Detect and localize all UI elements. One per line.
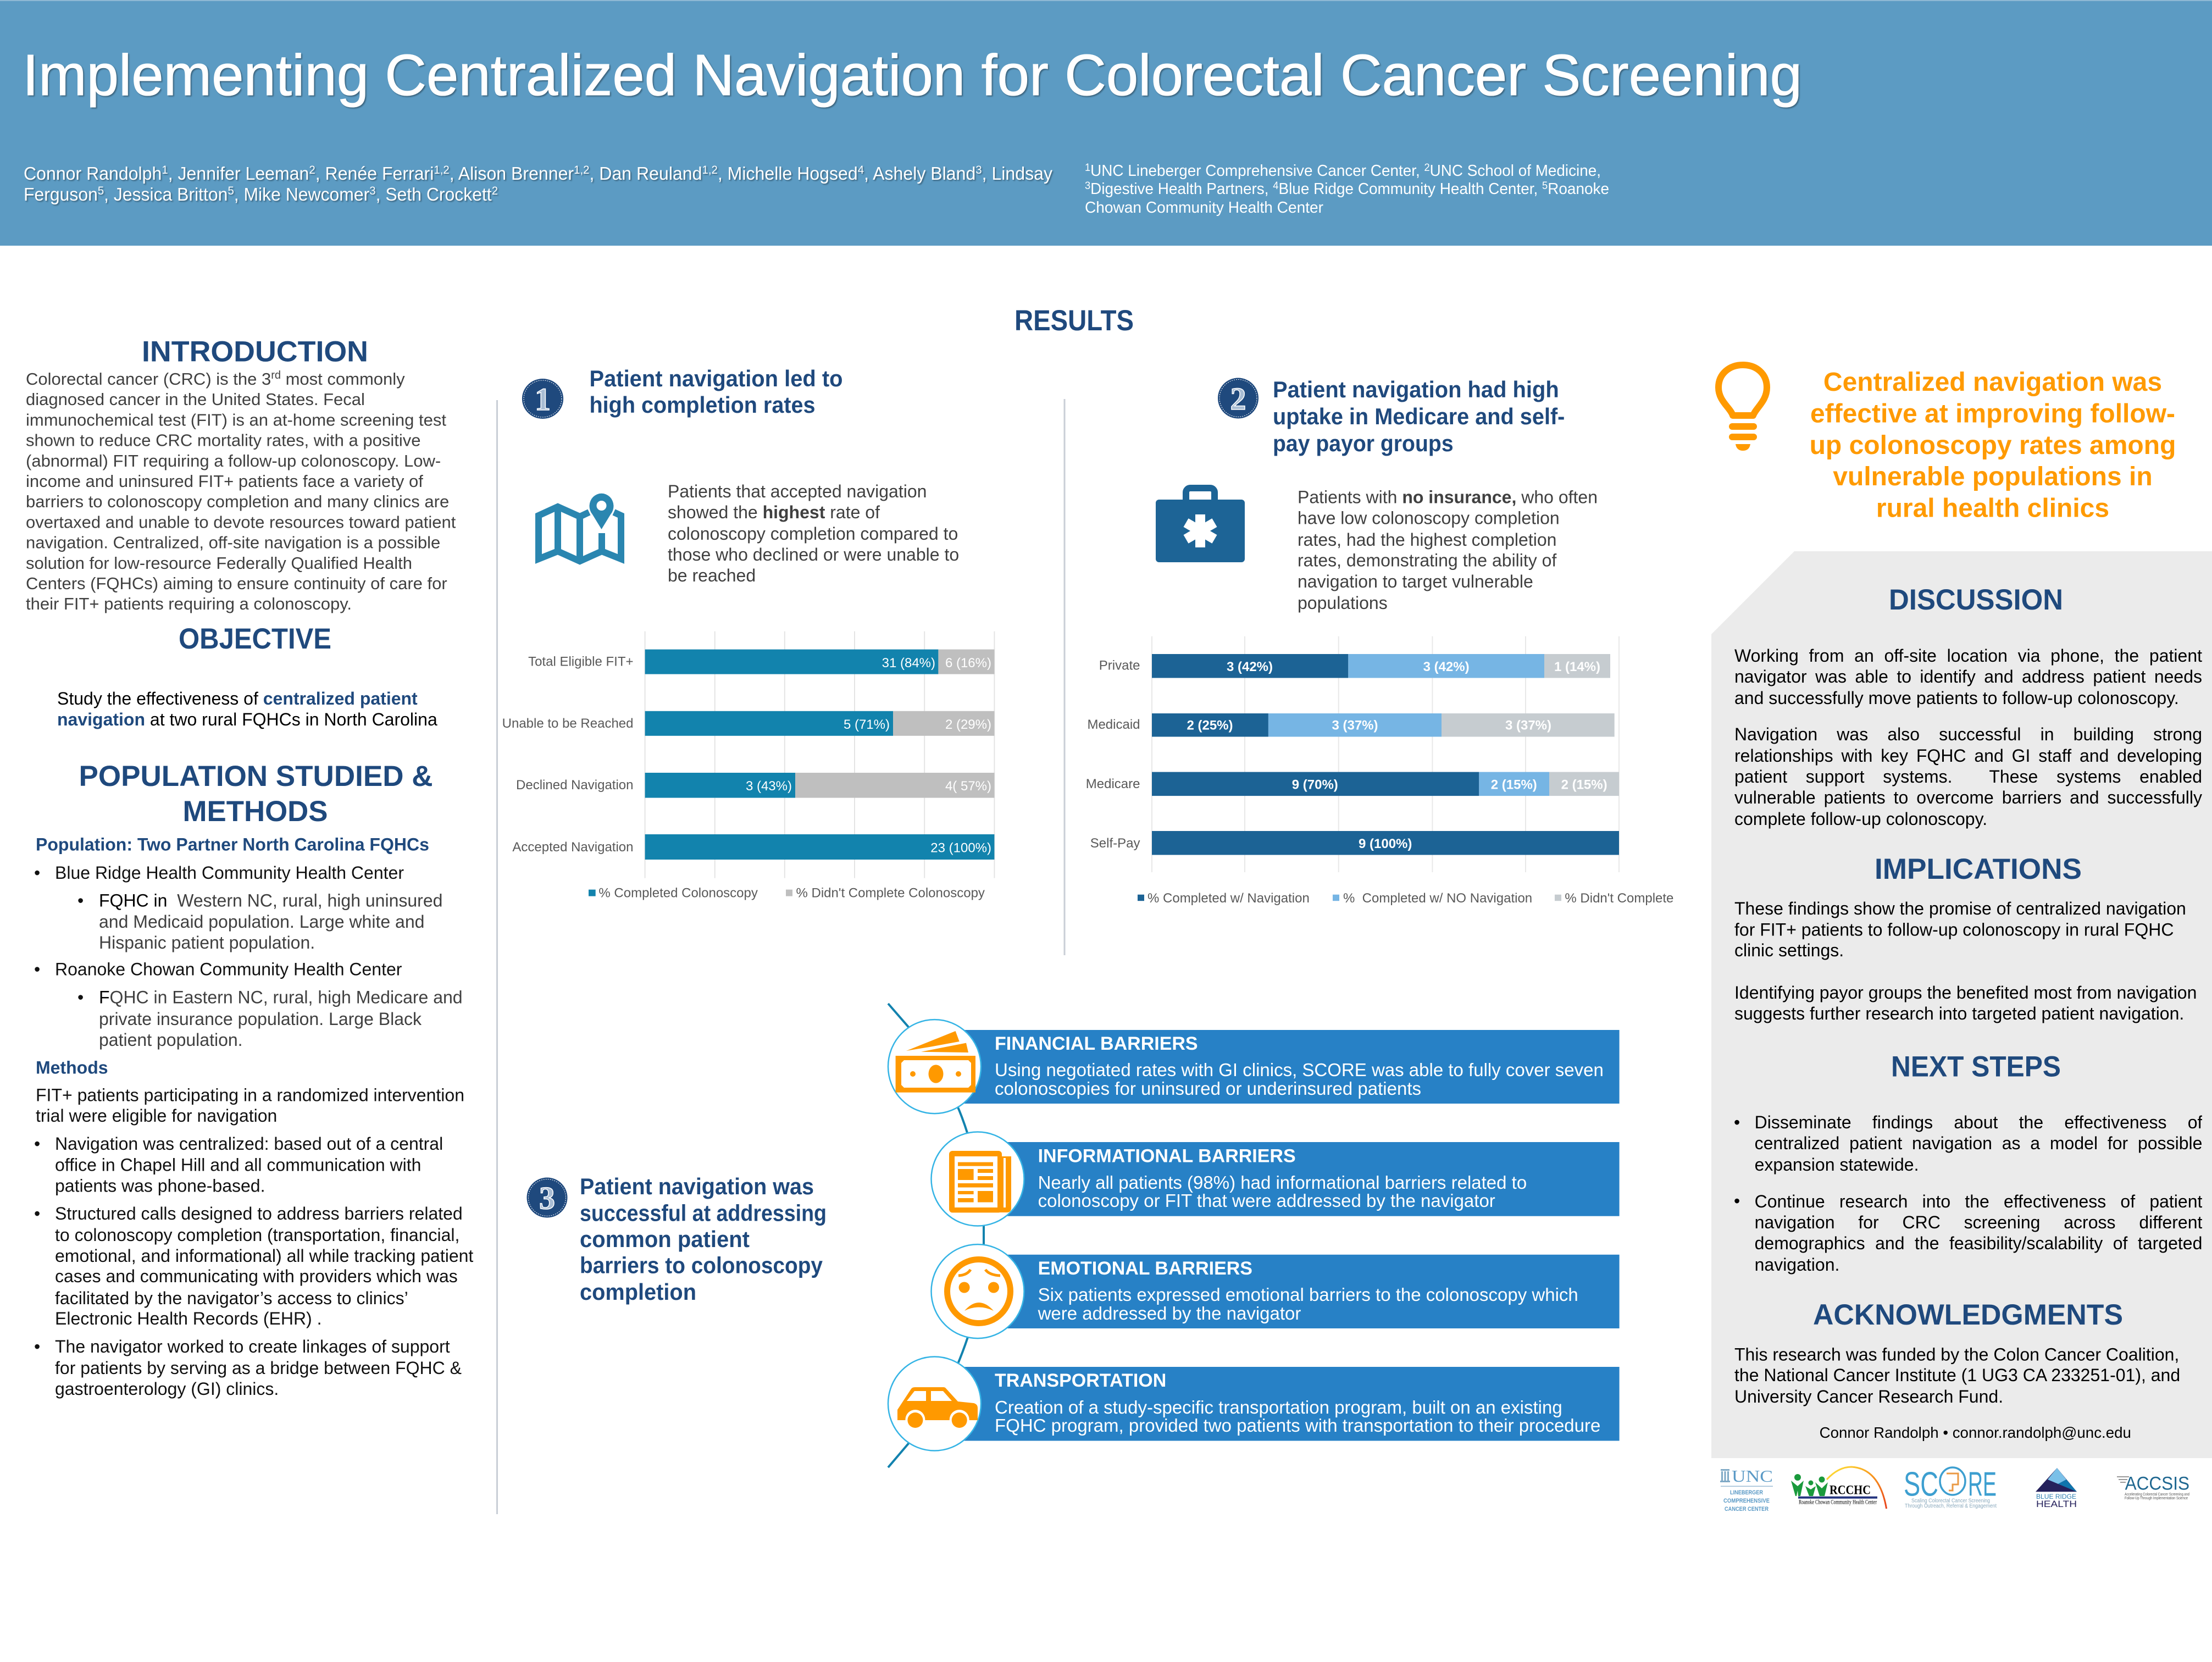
legend: completion chart bbox=[589, 886, 985, 901]
authors: 1 bbox=[162, 164, 168, 176]
authors: , Dan Reuland bbox=[589, 163, 702, 184]
heading: result 2: Patient navigation had high bbox=[1273, 376, 1559, 402]
heading: result 1: Patient navigation led to bbox=[589, 365, 843, 391]
heading: result 3: successful at addressing bbox=[580, 1200, 827, 1226]
text: emotional: were addressed by the navigator bbox=[1038, 1303, 1301, 1323]
text: objective body: navigation at two rural FQHCs in North Carolina bbox=[57, 710, 437, 729]
text: methods list: emotional, and informational) all while tracking patient bbox=[55, 1246, 473, 1266]
heading: acknowledgments: ACKNOWLEDGMENTS bbox=[1813, 1299, 2123, 1331]
affiliations: Chowan Community Health Center bbox=[1085, 199, 1323, 217]
text: acknowledgments body bbox=[1734, 1344, 2180, 1406]
bar: private: 3 (42%) bbox=[1227, 660, 1273, 674]
text: introduction body: income and uninsured FIT+ patients face a variety of bbox=[26, 472, 423, 491]
bar: private: Private bbox=[1099, 658, 1140, 673]
heading: result 3: barriers to colonoscopy bbox=[580, 1253, 823, 1278]
text: financial: Using negotiated rates with GI clinics, SCORE was able to fully cover seven bbox=[995, 1060, 1604, 1080]
text: methods list: Structured calls designed to address barriers related bbox=[55, 1204, 463, 1223]
text: acknowledgments body: University Cancer Research Fund. bbox=[1734, 1387, 2003, 1406]
legend: payor chart: % Completed w/ Navigation bbox=[1147, 891, 1310, 906]
bar: medicaid: Medicaid bbox=[1087, 717, 1140, 732]
text: next steps list: demographics and the feasibility/scalability of targeted bbox=[1755, 1233, 2202, 1253]
legend: payor chart: % Didn't Complete bbox=[1565, 891, 1673, 906]
icon: newspaper bbox=[949, 1151, 1011, 1212]
authors: 2 bbox=[492, 185, 498, 197]
bar: private: 1 (14%) bbox=[1554, 660, 1600, 674]
barrier: informational bbox=[931, 1132, 1620, 1226]
text: result 2 description: rates, had the highest completion bbox=[1298, 530, 1556, 550]
text: result 1 description: showed the highest rate of bbox=[668, 502, 880, 522]
text: acknowledgments body: This research was funded by the Colon Cancer Coalition, bbox=[1734, 1344, 2179, 1364]
authors: , Michelle Hogsed bbox=[718, 163, 858, 184]
bar: medicare bbox=[1086, 772, 1619, 796]
text: next steps list: Continue research into the effectiveness of patient bbox=[1755, 1192, 2202, 1211]
text: result 1 description: be reached bbox=[668, 566, 756, 585]
logo: Blue Ridge Health: BLUE RIDGE bbox=[2036, 1493, 2076, 1500]
text: introduction body: (abnormal) FIT requiring a follow-up colonoscopy. Low- bbox=[26, 451, 441, 470]
bar: accepted navigation: 23 (100%) bbox=[930, 841, 991, 856]
text: methods list bbox=[34, 1085, 473, 1399]
text: introduction body: overtaxed and unable to devote resources toward patient bbox=[26, 512, 456, 531]
heading: population studied and methods bbox=[79, 760, 433, 828]
icon: number 1: 1 bbox=[535, 381, 551, 417]
bar: self-pay bbox=[1090, 831, 1619, 855]
authors: 5 bbox=[228, 185, 234, 197]
panel: result 2 payor groups bbox=[1086, 376, 1673, 906]
authors: , Renée Ferrari bbox=[315, 163, 434, 184]
logo: ACCSIS: Accelerating Colorectal Cancer Screening and bbox=[2125, 1492, 2189, 1497]
bar: medicare: 2 (15%) bbox=[1491, 777, 1537, 793]
heading: population studied and methods: POPULATION STUDIED & bbox=[79, 760, 433, 793]
heading: result 3: completion bbox=[580, 1279, 696, 1305]
icon: number 1 bbox=[522, 379, 563, 419]
text: transportation bbox=[995, 1370, 1600, 1436]
text: methods list: facilitated by the navigator’s access to clinics’ bbox=[55, 1288, 408, 1308]
text: result 2 description: Patients with no insurance, who often bbox=[1298, 487, 1598, 507]
heading: result 2: uptake in Medicare and self- bbox=[1273, 403, 1565, 429]
affiliations: 1 bbox=[1085, 162, 1090, 174]
text: introduction body: shown to reduce CRC mortality rates, with a positive bbox=[26, 431, 420, 450]
text: population list: • bbox=[77, 988, 84, 1007]
icon: map with pin bbox=[539, 494, 621, 561]
text: result 2 description bbox=[1298, 487, 1598, 613]
logo: SCORE: Scaling Colorectal Cancer Screening bbox=[1911, 1498, 1990, 1504]
callout: key takeaway: vulnerable populations in bbox=[1833, 462, 2153, 491]
icon: sad face bbox=[947, 1260, 1010, 1323]
bar: declined navigation: Declined Navigation bbox=[516, 778, 633, 793]
text: population list: FQHC in Eastern NC, rural, high Medicare and bbox=[99, 988, 463, 1007]
authors: , Ashely Bland bbox=[864, 163, 975, 184]
authors: Connor Randolph bbox=[24, 163, 166, 184]
heading: result 2 bbox=[1273, 376, 1565, 456]
text: introduction body: diagnosed cancer in the United States. Fecal bbox=[26, 390, 365, 409]
heading: implications: IMPLICATIONS bbox=[1875, 853, 2082, 885]
text: introduction body: Centers (FQHCs) aiming to ensure continuity of care for bbox=[26, 574, 447, 593]
text: discussion body bbox=[1734, 645, 2202, 832]
logo: SCORE: SC bbox=[1904, 1466, 1938, 1504]
bar: declined navigation: 3 (43%) bbox=[746, 779, 792, 794]
icon: lightbulb bbox=[1718, 365, 1767, 451]
text: methods list: Electronic Health Records (EHR) . bbox=[55, 1309, 321, 1328]
text: population list: and Medicaid population. Large white and bbox=[99, 912, 424, 932]
bar: unable to be reached: 2 (29%) bbox=[945, 717, 991, 732]
text: implications body: These findings show the promise of centralized navigation bbox=[1734, 899, 2186, 918]
text: population list: patient population. bbox=[99, 1030, 243, 1050]
callout: key takeaway: effective at improving follow- bbox=[1810, 399, 2175, 429]
text: methods list: for patients by serving as a bridge between FQHC & bbox=[55, 1358, 462, 1378]
text: acknowledgments body: the National Cancer Institute (1 UG3 CA 233251-01), and bbox=[1734, 1365, 2180, 1385]
text: implications body bbox=[1734, 899, 2197, 1023]
bar: total eligible: 6 (16%) bbox=[945, 656, 991, 671]
bar: total eligible: Total Eligible FIT+ bbox=[528, 655, 633, 669]
subheading: methods: Methods bbox=[36, 1057, 108, 1077]
text: next steps list: • bbox=[1734, 1112, 1740, 1132]
text: result 2 description: populations bbox=[1298, 593, 1388, 613]
text: next steps list: • bbox=[1734, 1191, 1740, 1211]
bar: unable to be reached bbox=[502, 711, 994, 736]
heading: result 3 bbox=[580, 1173, 827, 1305]
text: implications body: suggests further research into targeted patient navigation. bbox=[1734, 1004, 2184, 1023]
heading: discussion: DISCUSSION bbox=[1889, 584, 2063, 616]
authors: 1,2 bbox=[434, 164, 450, 176]
legend: payor chart bbox=[1138, 891, 1673, 906]
text: transportation: TRANSPORTATION bbox=[995, 1370, 1166, 1391]
logo: SCORE bbox=[1904, 1466, 1997, 1509]
logo: UNC Lineberger: CANCER CENTER bbox=[1725, 1506, 1769, 1513]
text: methods list: The navigator worked to create linkages of support bbox=[55, 1337, 450, 1356]
affiliations: 3 bbox=[1085, 180, 1090, 192]
text: contact: Connor Randolph • connor.randolph@unc.edu bbox=[1820, 1424, 2131, 1441]
text: population list: private insurance population. Large Black bbox=[99, 1009, 422, 1029]
text: discussion body: complete follow-up colonoscopy. bbox=[1734, 809, 1987, 829]
title: Implementing Centralized Navigation for Colorectal Cancer Screening bbox=[23, 43, 1802, 108]
bar: private: 3 (42%) bbox=[1423, 660, 1470, 674]
text: population list: Hispanic patient population. bbox=[99, 933, 315, 952]
text: population list: Blue Ridge Health Community Health Center bbox=[55, 863, 404, 883]
text: discussion body: patient support systems. These systems enabled bbox=[1734, 767, 2202, 786]
affiliations: UNC Lineberger Comprehensive Cancer Center, bbox=[1090, 162, 1424, 180]
text: methods list: • bbox=[34, 1204, 40, 1223]
chart: payor stacked bars bbox=[1086, 636, 1673, 906]
authors: 1,2 bbox=[702, 164, 718, 176]
authors: 4 bbox=[858, 164, 864, 176]
text: informational: Nearly all patients (98%) had informational barriers related to bbox=[1038, 1172, 1527, 1193]
text: discussion body: Working from an off-site location via phone, the patient bbox=[1734, 646, 2202, 666]
callout: key takeaway bbox=[1810, 368, 2176, 523]
icon: number 3: 3 bbox=[539, 1181, 555, 1216]
bar: unable to be reached: Unable to be Reached bbox=[502, 716, 633, 731]
text: methods list: trial were eligible for navigation bbox=[36, 1106, 277, 1126]
heading: objective: OBJECTIVE bbox=[179, 623, 331, 655]
text: objective body bbox=[57, 689, 437, 729]
text: methods list: • bbox=[34, 1134, 40, 1154]
text: objective body: Study the effectiveness of centralized patient bbox=[57, 689, 418, 708]
affiliations: Blue Ridge Community Health Center, bbox=[1278, 180, 1542, 198]
logo: SCORE: RE bbox=[1968, 1466, 1997, 1504]
logo: ACCSIS bbox=[2117, 1473, 2189, 1500]
heading: population studied and methods: METHODS bbox=[182, 795, 328, 828]
text: population list: • bbox=[34, 960, 40, 979]
bar: medicare: 9 (70%) bbox=[1292, 777, 1338, 793]
text: methods list: Navigation was centralized: based out of a central bbox=[55, 1134, 443, 1154]
text: next steps list: expansion statewide. bbox=[1755, 1155, 1919, 1175]
logo: RCCHC: RCCHC bbox=[1830, 1483, 1871, 1497]
text: emotional: EMOTIONAL BARRIERS bbox=[1038, 1258, 1252, 1279]
text: discussion body: vulnerable patients to overcome barriers and successfully bbox=[1734, 788, 2202, 807]
authors: 2 bbox=[309, 164, 315, 176]
panel: left column bbox=[26, 335, 473, 1399]
text: emotional bbox=[1038, 1258, 1578, 1323]
text: implications body: Identifying payor groups the benefited most from navigation bbox=[1734, 983, 2197, 1002]
authors: , Alison Brenner bbox=[450, 163, 574, 184]
text: discussion body: navigator was able to identify and address patient needs bbox=[1734, 667, 2202, 686]
logo: ACCSIS: ACCSIS bbox=[2125, 1473, 2189, 1494]
heading: result 1: high completion rates bbox=[589, 392, 816, 418]
logo: Blue Ridge Health bbox=[2036, 1468, 2077, 1509]
logo: UNC Lineberger: LINEBERGER bbox=[1730, 1489, 1763, 1496]
text: methods list: FIT+ patients participating in a randomized intervention bbox=[36, 1085, 464, 1105]
barrier: transportation bbox=[888, 1356, 1620, 1451]
text: financial: FINANCIAL BARRIERS bbox=[995, 1033, 1198, 1054]
text: informational: INFORMATIONAL BARRIERS bbox=[1038, 1146, 1296, 1167]
text: next steps list bbox=[1734, 1112, 2202, 1278]
bar: medicaid: 3 (37%) bbox=[1505, 718, 1551, 733]
text: result 2 description: have low colonoscopy completion bbox=[1298, 508, 1560, 528]
heading: results: RESULTS bbox=[1014, 304, 1134, 337]
affiliations: 5 bbox=[1542, 180, 1548, 192]
logo: SCORE: Through Outreach, Referral & Engagement bbox=[1905, 1503, 1997, 1509]
bar: self-pay: 9 (100%) bbox=[1359, 836, 1412, 851]
text: result 1 description bbox=[668, 481, 959, 585]
text: implications body: for FIT+ patients to follow-up colonoscopy in rural FQHC bbox=[1734, 920, 2174, 940]
text: methods list: cases and communicating with providers which was bbox=[55, 1266, 458, 1286]
authors: , Jessica Britton bbox=[104, 184, 228, 204]
logos row bbox=[1720, 1466, 2189, 1513]
panel: right column grey bbox=[1711, 551, 2212, 1458]
subheading: population: Population: Two Partner North Carolina FQHCs bbox=[36, 834, 429, 854]
heading: result 3: common patient bbox=[580, 1226, 750, 1252]
bar: declined navigation bbox=[516, 773, 994, 798]
text: introduction body: most commonly bbox=[281, 369, 405, 389]
logo: RCCHC bbox=[1791, 1467, 1887, 1509]
bar: medicare: 2 (15%) bbox=[1561, 777, 1607, 793]
text: financial: colonoscopies for uninsured or underinsured patients bbox=[995, 1078, 1421, 1099]
affiliations: Digestive Health Partners, bbox=[1090, 180, 1273, 198]
text: methods list: gastroenterology (GI) clinics. bbox=[55, 1379, 279, 1399]
bar: medicaid: 3 (37%) bbox=[1332, 718, 1378, 733]
text: population list: • bbox=[77, 891, 84, 911]
authors: Ferguson bbox=[24, 184, 100, 204]
authors: , Lindsay bbox=[982, 163, 1052, 184]
affiliations: UNC School of Medicine, bbox=[1430, 162, 1601, 180]
text: introduction body: solution for low-resource Federally Qualified Health bbox=[26, 553, 412, 573]
text: next steps list: navigation for CRC screening across different bbox=[1755, 1212, 2202, 1232]
legend: completion chart: % Completed Colonoscopy bbox=[598, 886, 758, 901]
bar: total eligible bbox=[528, 650, 994, 674]
text: emotional: Six patients expressed emotional barriers to the colonoscopy which bbox=[1038, 1284, 1578, 1305]
text: discussion body: relationships with key FQHC and GI staff and developing bbox=[1734, 746, 2202, 766]
icon: medical briefcase bbox=[1156, 488, 1245, 562]
authors: 1,2 bbox=[574, 164, 589, 176]
logo: UNC Lineberger: COMPREHENSIVE bbox=[1723, 1498, 1770, 1504]
barrier: emotional bbox=[931, 1244, 1620, 1338]
logo: Blue Ridge Health: HEALTH bbox=[2036, 1499, 2077, 1509]
text: population list: FQHC in Western NC, rural, high uninsured bbox=[99, 891, 442, 911]
authors: , Jennifer Leeman bbox=[168, 163, 309, 184]
bar: medicare: Medicare bbox=[1086, 777, 1140, 791]
authors: , Seth Crockett bbox=[376, 184, 492, 204]
bar: accepted navigation bbox=[512, 834, 994, 860]
bar: private bbox=[1099, 654, 1610, 678]
text: financial bbox=[995, 1033, 1604, 1099]
bar: medicaid: 2 (25%) bbox=[1187, 718, 1233, 733]
header banner bbox=[0, 0, 2212, 246]
panel: result 1 completion rates bbox=[502, 365, 994, 901]
heading: result 3: Patient navigation was bbox=[580, 1173, 814, 1199]
text: result 2 description: rates, demonstrating the ability of bbox=[1298, 551, 1556, 570]
icon: number 2 bbox=[1218, 378, 1259, 419]
text: result 1 description: those who declined or were unable to bbox=[668, 545, 959, 564]
logo: ACCSIS: Follow-Up Through Implementation Science bbox=[2125, 1495, 2188, 1500]
text: methods list: • bbox=[34, 1337, 40, 1356]
text: introduction body: barriers to colonoscopy completion and many clinics are bbox=[26, 492, 449, 511]
bar: medicaid bbox=[1087, 713, 1615, 736]
icon: car bbox=[897, 1387, 978, 1430]
text: introduction body: immunochemical test (FIT) is an at-home screening test bbox=[26, 410, 446, 429]
chart: completion stacked bars bbox=[502, 631, 994, 901]
text: informational bbox=[1038, 1146, 1527, 1211]
legend: payor chart: % Completed w/ NO Navigation bbox=[1343, 891, 1532, 906]
text: result 2 description: navigation to target vulnerable bbox=[1298, 572, 1533, 591]
heading: next steps: NEXT STEPS bbox=[1891, 1051, 2061, 1083]
text: introduction body: rd bbox=[271, 369, 281, 381]
logo: UNC Lineberger bbox=[1720, 1466, 1773, 1513]
affiliations: 4 bbox=[1273, 180, 1279, 192]
callout: key takeaway: Centralized navigation was bbox=[1823, 368, 2162, 397]
legend: completion chart: % Didn't Complete Colonoscopy bbox=[796, 886, 985, 901]
heading: result 1 bbox=[589, 365, 843, 418]
text: transportation: FQHC program, provided two patients with transportation to their procedure bbox=[995, 1415, 1600, 1436]
connector curve bbox=[888, 1004, 984, 1467]
heading: introduction: INTRODUCTION bbox=[142, 335, 368, 368]
text: introduction body: their FIT+ patients requiring a colonoscopy. bbox=[26, 594, 352, 613]
bar: accepted navigation: Accepted Navigation bbox=[512, 840, 633, 855]
authors bbox=[24, 163, 1052, 204]
callout: key takeaway: rural health clinics bbox=[1876, 494, 2109, 523]
authors: , Mike Newcomer bbox=[234, 184, 369, 204]
text: methods list: patients was phone-based. bbox=[55, 1176, 265, 1196]
logo: RCCHC: Roanoke Chowan Community Health Center bbox=[1799, 1499, 1877, 1506]
text: next steps list: navigation. bbox=[1755, 1255, 1839, 1275]
text: next steps list: centralized patient navigation as a model for possible bbox=[1755, 1133, 2202, 1153]
text: introduction body bbox=[26, 369, 456, 613]
logo: UNC Lineberger: UNC bbox=[1732, 1466, 1773, 1486]
text: introduction body: Colorectal cancer (CRC) is the 3 bbox=[26, 369, 271, 389]
text: transportation: Creation of a study-specific transportation program, built on an existing bbox=[995, 1397, 1562, 1417]
bar: unable to be reached: 5 (71%) bbox=[844, 717, 890, 732]
bar: self-pay: Self-Pay bbox=[1090, 836, 1140, 851]
text: result 1 description: Patients that accepted navigation bbox=[668, 481, 927, 501]
text: population list: • bbox=[34, 863, 40, 883]
affiliations bbox=[1085, 162, 1609, 217]
affiliations: 2 bbox=[1424, 162, 1430, 174]
text: discussion body: and successfully move patients to follow-up colonoscopy. bbox=[1734, 688, 2179, 708]
text: population list bbox=[34, 863, 463, 1050]
icon: number 2: 2 bbox=[1230, 381, 1246, 417]
bar: declined navigation: 4( 57%) bbox=[945, 779, 991, 794]
text: informational: colonoscopy or FIT that were addressed by the navigator bbox=[1038, 1190, 1495, 1211]
barrier: financial bbox=[888, 1020, 1620, 1113]
text: discussion body: Navigation was also successful in building strong bbox=[1734, 724, 2202, 744]
callout: key takeaway: up colonoscopy rates among bbox=[1810, 431, 2176, 460]
icon: number 3 bbox=[526, 1177, 567, 1218]
text: implications body: clinic settings. bbox=[1734, 940, 1844, 960]
text: methods list: to colonoscopy completion (transportation, financial, bbox=[55, 1225, 459, 1245]
bar: total eligible: 31 (84%) bbox=[882, 656, 935, 671]
heading: result 2: pay payor groups bbox=[1273, 430, 1454, 456]
text: methods list: office in Chapel Hill and all communication with bbox=[55, 1155, 421, 1175]
authors: 5 bbox=[98, 185, 104, 197]
panel: result 3 barriers bbox=[526, 1004, 1620, 1467]
text: population list: Roanoke Chowan Community Health Center bbox=[55, 960, 402, 979]
affiliations: Roanoke bbox=[1548, 180, 1609, 198]
authors: 3 bbox=[975, 164, 982, 176]
text: next steps list: Disseminate findings about the effectiveness of bbox=[1755, 1112, 2202, 1132]
text: result 1 description: colonoscopy completion compared to bbox=[668, 524, 958, 544]
icon: money bbox=[896, 1031, 975, 1093]
text: introduction body: navigation. Centralized, off-site navigation is a possible bbox=[26, 533, 440, 552]
authors: 3 bbox=[369, 185, 376, 197]
